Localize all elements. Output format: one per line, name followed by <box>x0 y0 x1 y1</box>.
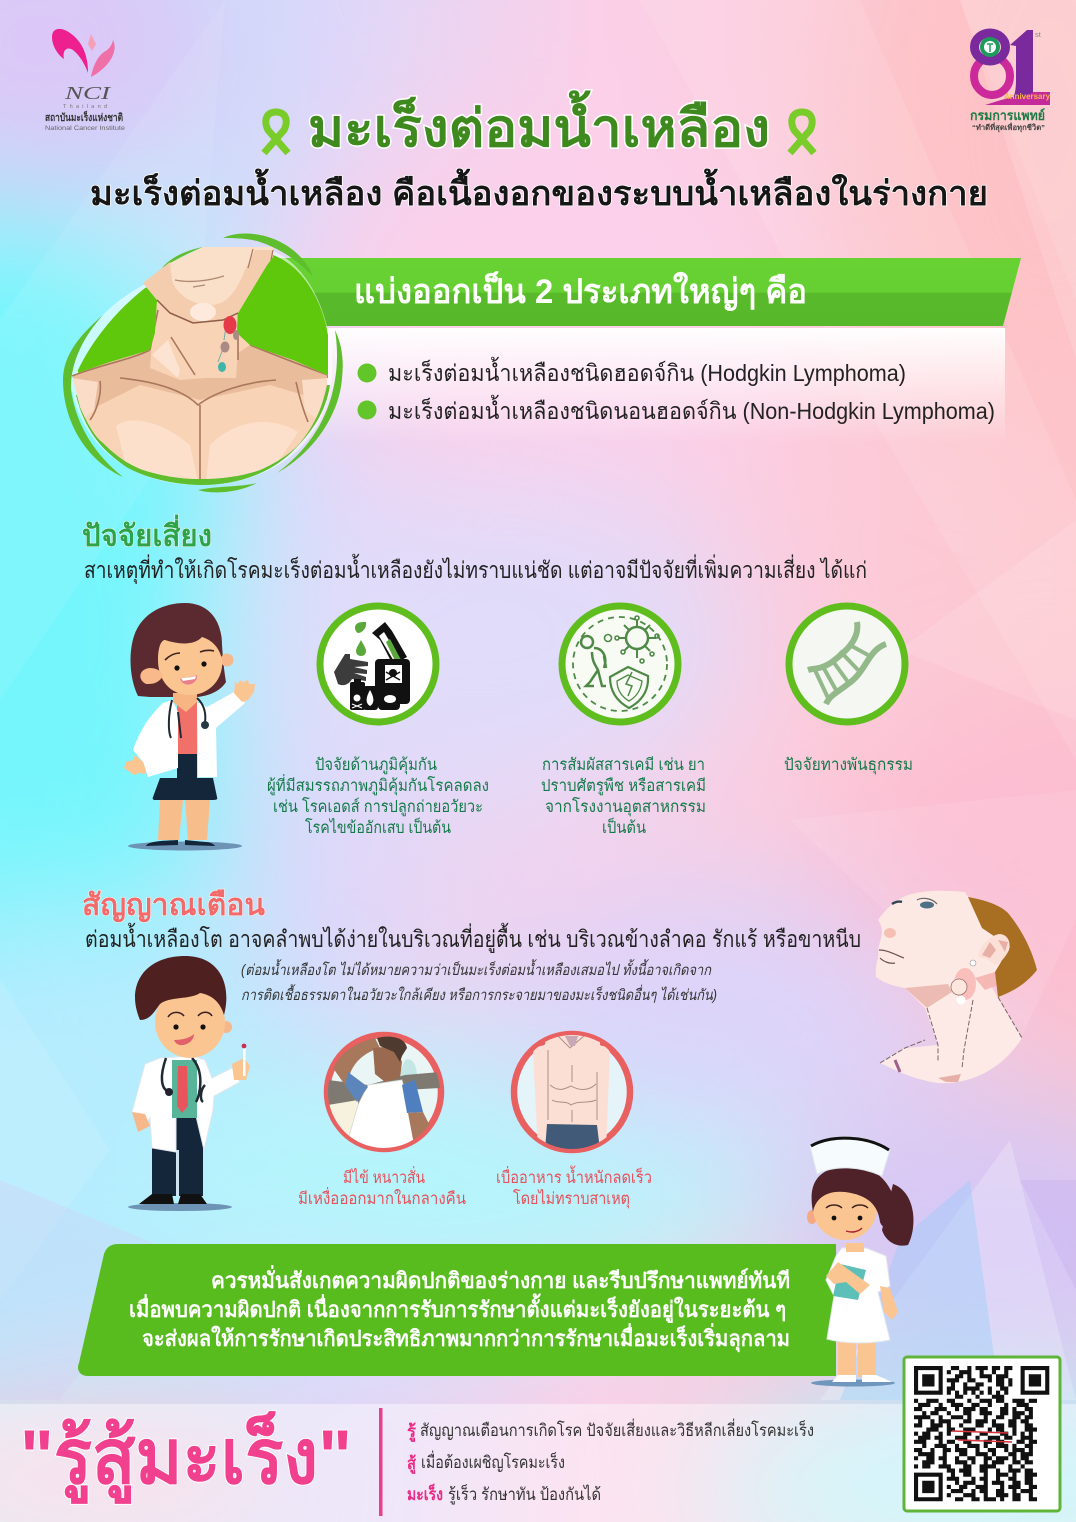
caption: weight loss <box>496 1165 652 1209</box>
line: fight <box>407 1450 565 1475</box>
risk factor: immunity / chemicals icon <box>320 606 436 722</box>
title: มะเร็งต่อมน้ำเหลือง <box>308 90 770 158</box>
logo: National Cancer Institute: สถาบันมะเร็งแห่งชาติ <box>45 110 123 124</box>
line: cancer <box>407 1482 601 1505</box>
line: fight: เมื่อต้องเผชิญโรคมะเร็ง <box>421 1450 565 1472</box>
banner heading: แบ่งออกเป็น 2 ประเภทใหญ่ๆ คือ <box>354 270 807 312</box>
text: warning signs note: การติดเชื้อธรรมดาในอวัยวะใกล้เคียง หรือการกระจายมาของมะเร็งชนิดอื่นๆ ได้เช่นกัน) <box>241 984 717 1004</box>
illustration: female doctor <box>124 603 255 850</box>
callout: advice <box>78 1244 836 1376</box>
caption: weight loss: โดยไม่ทราบสาเหตุ <box>513 1189 630 1209</box>
logo: National Cancer Institute: National Cancer Institute <box>45 125 125 132</box>
heading: risk factors: ปัจจัยเสี่ยง <box>82 514 212 553</box>
logo: National Cancer Institute <box>45 29 125 132</box>
line: cancer: มะเร็ง <box>407 1482 443 1504</box>
warning sign: fever and night sweats <box>327 1035 441 1150</box>
text: warning signs note <box>241 959 717 1004</box>
caption: fever: มีไข้ หนาวสั่น <box>343 1166 425 1187</box>
line: know: สัญญาณเตือนการเกิดโรค ปัจจัยเสี่ยงและวิธีหลีกเลี่ยงโรคมะเร็ง <box>420 1418 814 1440</box>
caption: fever: มีเหงื่อออกมากในกลางคืน <box>298 1187 466 1208</box>
logo caption: กรมการแพทย์ <box>970 108 1045 123</box>
caption: fever <box>298 1166 466 1208</box>
logo: 81st anniversary: Anniversary <box>1004 91 1050 101</box>
caption: chemical exposure: ปราบศัตรูพืช หรือสารเคมี <box>541 777 706 796</box>
callout: advice: ควรหมั่นสังเกตความผิดปกติของร่างกาย และรีบปรึกษาแพทย์ทันที <box>211 1264 790 1293</box>
logo: National Cancer Institute: Thailand <box>63 104 107 110</box>
band: slogan background <box>0 1404 1076 1522</box>
line: know <box>407 1418 814 1443</box>
risk factor: chemical / virus icon <box>562 606 678 722</box>
caption: chemical exposure: การสัมผัสสารเคมี เช่น ยา <box>542 756 705 774</box>
text: warning signs intro: ต่อมน้ำเหลืองโต อาจคลำพบได้ง่ายในบริเวณที่อยู่ตื้น เช่น บริเวณข้างลำคอ รักแร้ หรือขาหนีบ <box>85 923 861 953</box>
bullet Hodgkin: มะเร็งต่อมน้ำเหลืองชนิดฮอดจ์กิน (Hodgkin Lymphoma) <box>388 357 906 386</box>
callout: advice: จะส่งผลให้การรักษาเกิดประสิทธิภาพมากกว่าการรักษาเมื่อมะเร็งเริ่มลุกลาม <box>142 1322 790 1353</box>
caption: weight loss: เบื่ออาหาร น้ำหนักลดเร็ว <box>496 1165 652 1187</box>
illustration: male doctor <box>128 956 250 1211</box>
logo wordmark NCI: NCI <box>64 83 111 103</box>
text: slogan explanation <box>407 1418 814 1505</box>
illustration: nurse <box>807 1137 913 1386</box>
line: know: รู้ <box>407 1422 417 1443</box>
line: cancer: รู้เร็ว รักษาทัน ป้องกันได้ <box>448 1483 601 1505</box>
subtitle: มะเร็งต่อมน้ำเหลือง คือเนื้องอกของระบบน้ำเหลืองในร่างกาย <box>90 168 988 213</box>
line: fight: สู้ <box>407 1454 417 1475</box>
callout: advice: เมื่อพบความผิดปกติ เนื่องจากการรับการรักษาตั้งแต่มะเร็งยังอยู่ในระยะต้น ๆ <box>129 1293 786 1324</box>
QR code <box>904 1357 1060 1511</box>
divider line <box>379 1408 382 1516</box>
bullet Non-Hodgkin: มะเร็งต่อมน้ำเหลืองชนิดนอนฮอดจ์กิน (Non-Hodgkin Lymphoma) <box>388 395 995 424</box>
caption: immunity factor <box>267 756 489 837</box>
logo: 81st anniversary <box>970 30 1050 132</box>
caption: immunity factor: เช่น โรคเอดส์ การปลูกถ่ายอวัยวะ <box>273 797 483 817</box>
caption: immunity factor: ปัจจัยด้านภูมิคุ้มกัน <box>315 756 437 775</box>
caption: chemical exposure <box>541 756 706 837</box>
risk factor: DNA icon <box>789 606 905 722</box>
heading: warning signs: สัญญาณเตือน <box>82 889 265 923</box>
panel: two types <box>270 258 1021 443</box>
panel background white <box>300 328 1005 443</box>
caption: genetic factor: ปัจจัยทางพันธุกรรม <box>784 756 913 775</box>
warning sign: weight loss <box>514 1034 630 1150</box>
caption: chemical exposure: จากโรงงานอุตสาหกรรม <box>545 797 706 817</box>
logo: 81st anniversary: st <box>1035 30 1042 39</box>
icon: green ribbon left <box>264 112 288 153</box>
icon: green ribbon right <box>790 112 814 153</box>
banner <box>270 258 1021 326</box>
slogan: know and fight cancer: "รู้สู้มะเร็ง" <box>20 1411 352 1504</box>
illustration: neck with swollen lymph nodes <box>60 234 343 492</box>
text: risk factors intro: สาเหตุที่ทำให้เกิดโรคมะเร็งต่อมน้ำเหลืองยังไม่ทราบแน่ชัด แต่อาจมีปัจจัยที่เพิ่มความเสี่ยง ได้แก่ <box>84 554 867 584</box>
illustration: woman's neck with lumps <box>876 891 1037 1083</box>
text: warning signs note: (ต่อมน้ำเหลืองโต ไม่ได้หมายความว่าเป็นมะเร็งต่อมน้ำเหลืองเสมอไป ทั้งนี้อาจเกิดจาก <box>241 959 712 979</box>
caption: chemical exposure: เป็นต้น <box>602 817 646 837</box>
caption: immunity factor: โรคไขข้ออักเสบ เป็นต้น <box>305 817 451 837</box>
caption: immunity factor: ผู้ที่มีสมรรถภาพภูมิคุ้มกันโรคลดลง <box>267 774 489 796</box>
logo: 81st anniversary: “ทำดีที่สุดเพื่อทุกชีวิต” <box>972 121 1045 132</box>
